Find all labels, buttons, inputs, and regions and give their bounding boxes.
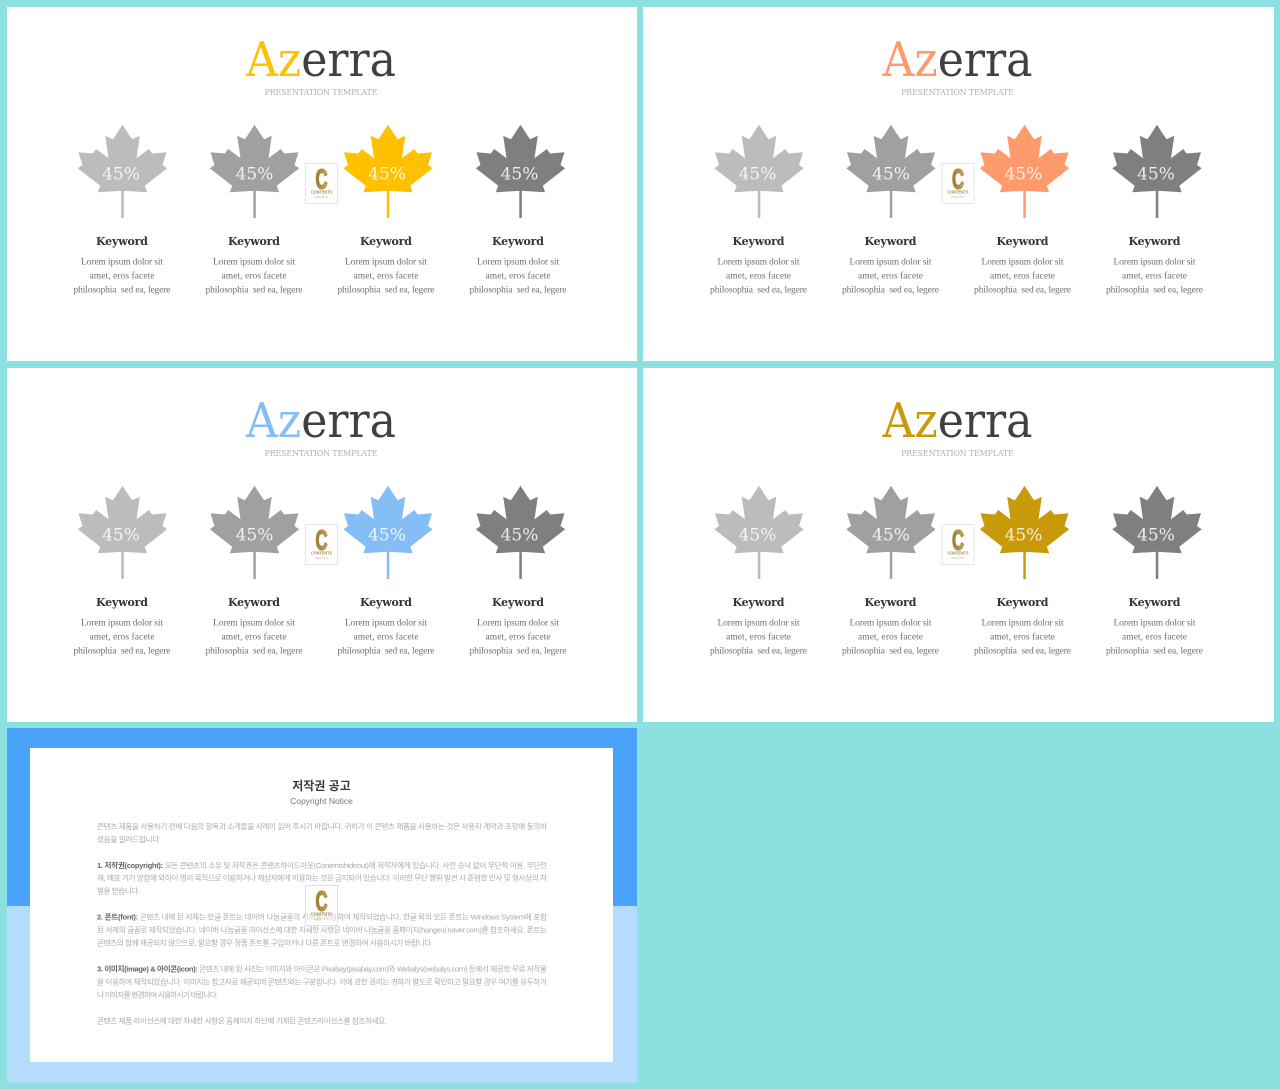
text column 4: amet, eros facete bbox=[486, 270, 550, 282]
paragraph: copyright bbox=[97, 860, 547, 896]
text column 3: Lorem ipsum dolor sit bbox=[982, 258, 1064, 268]
text column 3: philosophia sed ea, legere bbox=[338, 646, 434, 656]
text column 4: philosophia sed ea, legere bbox=[470, 646, 566, 656]
logo: CONTENTS bbox=[311, 912, 332, 916]
leaf 3 accent: 45% bbox=[1005, 526, 1042, 546]
text column 3: philosophia sed ea, legere bbox=[974, 646, 1071, 656]
leaf 4 bbox=[476, 486, 565, 579]
leaf 3 accent bbox=[980, 486, 1069, 579]
logo: C bbox=[952, 524, 964, 556]
logo: CONTENTS bbox=[311, 190, 332, 194]
leaf 1 bbox=[78, 486, 167, 579]
text column 4: Lorem ipsum dolor sit bbox=[477, 618, 559, 628]
logo: C bbox=[316, 164, 328, 194]
text column 2 bbox=[206, 235, 302, 296]
text column 2: Lorem ipsum dolor sit bbox=[213, 258, 295, 268]
leaf 1: 45% bbox=[739, 526, 776, 546]
text column 4: philosophia sed ea, legere bbox=[470, 286, 566, 296]
text column 3 bbox=[974, 596, 1071, 656]
text column 3: amet, eros facete bbox=[990, 270, 1055, 282]
leaf 2 bbox=[846, 486, 936, 579]
text column 1: amet, eros facete bbox=[90, 270, 154, 282]
leaf 2 bbox=[846, 125, 936, 218]
panel: orange slide bbox=[643, 7, 1274, 361]
logo bbox=[306, 886, 338, 926]
leaf 1: 45% bbox=[102, 164, 140, 184]
text column 3: Lorem ipsum dolor sit bbox=[345, 618, 427, 628]
text column 4: Keyword bbox=[1128, 596, 1181, 609]
text column 1: Lorem ipsum dolor sit bbox=[81, 258, 163, 268]
leaf 4 bbox=[1112, 486, 1202, 579]
leaf 2 bbox=[210, 125, 299, 218]
text column 1: philosophia sed ea, legere bbox=[710, 286, 807, 296]
text column 4: philosophia sed ea, legere bbox=[1106, 286, 1203, 296]
text column 4: Lorem ipsum dolor sit bbox=[477, 258, 559, 268]
logo bbox=[942, 524, 974, 564]
text column 2: Keyword bbox=[864, 596, 917, 609]
title: Azerra bbox=[245, 393, 396, 449]
panel: blue slide bbox=[7, 368, 637, 722]
text column 3: amet, eros facete bbox=[990, 632, 1055, 642]
leaf 4 bbox=[476, 125, 565, 218]
title: Azerra bbox=[245, 32, 396, 88]
text column 1: Lorem ipsum dolor sit bbox=[718, 618, 800, 628]
notice heading: 저작권 공고 bbox=[292, 778, 351, 793]
subtitle: PRESENTATION TEMPLATE bbox=[264, 449, 378, 458]
text column 2 bbox=[842, 596, 939, 656]
text column 4: Keyword bbox=[492, 596, 544, 609]
notice subheading: Copyright Notice bbox=[290, 796, 353, 806]
leaf 4: 45% bbox=[501, 164, 538, 184]
subtitle: PRESENTATION TEMPLATE bbox=[901, 88, 1014, 97]
text column 4: amet, eros facete bbox=[1122, 632, 1187, 642]
text column 2: amet, eros facete bbox=[222, 270, 286, 282]
text column 2: amet, eros facete bbox=[222, 632, 286, 642]
closing line: 콘텐츠 제품 라이선스에 대한 자세한 사항은 홈페이지 하단에 기재된 콘텐츠라이선스를 참조하세요. bbox=[97, 1016, 387, 1026]
leaf 1: 45% bbox=[102, 526, 140, 546]
text column 1 bbox=[710, 235, 807, 296]
text column 1: Lorem ipsum dolor sit bbox=[81, 618, 163, 628]
text column 3: Keyword bbox=[360, 235, 412, 248]
text column 4: philosophia sed ea, legere bbox=[1106, 646, 1203, 656]
leaf 3 accent: 45% bbox=[368, 164, 406, 184]
leaf 4: 45% bbox=[1137, 526, 1175, 546]
paragraph: image and icon: 을 이용하여 제작되었습니다. 이미지는 참고자료 제공되며 콘텐츠와는 구분합니다. 이에 관한 권리는 귀하가 별도로 확인하고 필요할 경우 여기를 유두하거 bbox=[97, 976, 547, 986]
text column 2: Lorem ipsum dolor sit bbox=[850, 618, 932, 628]
text column 1: philosophia sed ea, legere bbox=[74, 646, 170, 656]
text column 3: philosophia sed ea, legere bbox=[338, 286, 434, 296]
panel: copyright notice bbox=[7, 728, 637, 1083]
paragraph: image and icon: 3. 이미지(image) & 아이콘(icon): 콘텐츠 내에 된 사진는 이미지와 아이콘은 Pixabay(pixabay.com)와 Webalys(webalys.com) 등에서 제공한 무료 저작물 bbox=[97, 964, 547, 974]
paragraph: font: 된 서체의 글꼴로 제작되었습니다. 네이버 나눔글꼴 라이선스에 대한 자세한 사항은 네이버 나눔글꼴 홈페이지(hangeul.naver.com)를 참조하세요. 폰트는 bbox=[97, 924, 547, 934]
text column 1: philosophia sed ea, legere bbox=[74, 286, 170, 296]
logo: C bbox=[316, 886, 328, 916]
text column 4: Keyword bbox=[492, 235, 544, 248]
text column 1: Lorem ipsum dolor sit bbox=[718, 258, 800, 268]
leaf 4 bbox=[1112, 125, 1202, 218]
text column 3 bbox=[974, 235, 1071, 296]
paragraph: copyright: 벌을 받습니다. bbox=[97, 886, 140, 896]
text column 1 bbox=[710, 596, 807, 656]
logo: HIDE OUT bbox=[314, 556, 329, 560]
text column 2: Lorem ipsum dolor sit bbox=[850, 258, 932, 268]
text column 4: amet, eros facete bbox=[486, 632, 550, 642]
leaf 4: 45% bbox=[1137, 164, 1175, 184]
text column 4 bbox=[470, 235, 566, 296]
paragraph: image and icon bbox=[97, 964, 547, 1000]
leaf 2: 45% bbox=[236, 526, 273, 546]
leaf 2: 45% bbox=[236, 164, 273, 184]
leaf 3 accent: 45% bbox=[368, 526, 406, 546]
text column 4 bbox=[1106, 235, 1203, 296]
text column 1: philosophia sed ea, legere bbox=[710, 646, 807, 656]
text column 3: Lorem ipsum dolor sit bbox=[982, 618, 1064, 628]
leaf 1 bbox=[714, 125, 804, 218]
text column 2: philosophia sed ea, legere bbox=[206, 646, 302, 656]
text column 2: amet, eros facete bbox=[858, 632, 923, 642]
leaf 1 bbox=[78, 125, 167, 218]
logo: C bbox=[952, 164, 964, 194]
subtitle: PRESENTATION TEMPLATE bbox=[901, 449, 1014, 458]
text column 3: philosophia sed ea, legere bbox=[974, 286, 1071, 296]
leaf 3 accent: 45% bbox=[1005, 164, 1042, 184]
text column 4 bbox=[470, 596, 566, 656]
logo: CONTENTS bbox=[948, 190, 968, 194]
leaf 2: 45% bbox=[872, 164, 910, 184]
paragraph: image and icon: 나 이미지를 변경하여 사용하시기 바랍니다. bbox=[97, 990, 218, 1000]
subtitle: PRESENTATION TEMPLATE bbox=[264, 88, 378, 97]
text column 1: Keyword bbox=[732, 235, 785, 248]
logo: C bbox=[316, 524, 328, 556]
text column 1: Keyword bbox=[732, 596, 785, 609]
paragraph: font: 2. 폰트(font): 콘텐츠 내에 된 서체는 한글 폰트는 네이버 나눔글꼴의 서체를 사용하여 제작되었습니다. 한글 외의 모든 폰트는 Windows System에 포함 bbox=[97, 912, 547, 922]
leaf 2: 45% bbox=[872, 526, 910, 546]
text column 4: Keyword bbox=[1128, 235, 1181, 248]
paragraph: copyright: 1. 저작권(copyright): 모든 콘텐츠의 소유 및 저작권은 콘텐츠하이드아웃(Contentshideout)에 저작자에게 있습니다. 사전 승낙 없이 무단적 이용, 무단전 bbox=[97, 860, 547, 870]
text column 1: amet, eros facete bbox=[726, 632, 791, 642]
logo: HIDE OUT bbox=[951, 195, 965, 199]
logo: HIDE OUT bbox=[951, 556, 965, 560]
intro paragraph: 셨음을 알려드립니다. bbox=[97, 834, 161, 844]
leaf 3 accent bbox=[343, 125, 433, 218]
logo bbox=[306, 524, 338, 564]
leaf 1 bbox=[714, 486, 804, 579]
panel: yellow slide bbox=[7, 7, 637, 361]
leaf 2 bbox=[210, 486, 299, 579]
text column 3: amet, eros facete bbox=[354, 270, 418, 282]
logo bbox=[942, 164, 974, 204]
title: Azerra bbox=[882, 32, 1032, 88]
text column 3: amet, eros facete bbox=[354, 632, 418, 642]
text column 4 bbox=[1106, 596, 1203, 656]
leaf 3 accent bbox=[980, 125, 1069, 218]
text column 3 bbox=[338, 596, 434, 656]
logo: CONTENTS bbox=[948, 550, 968, 556]
text column 4: Lorem ipsum dolor sit bbox=[1114, 258, 1196, 268]
text column 2: amet, eros facete bbox=[858, 270, 923, 282]
text column 1: Keyword bbox=[96, 235, 148, 248]
text column 1 bbox=[74, 596, 170, 656]
text column 2 bbox=[842, 235, 939, 296]
text column 1: amet, eros facete bbox=[90, 632, 154, 642]
leaf 1: 45% bbox=[739, 164, 776, 184]
text column 3: Keyword bbox=[360, 596, 412, 609]
text column 2: philosophia sed ea, legere bbox=[842, 286, 939, 296]
text column 2: philosophia sed ea, legere bbox=[206, 286, 302, 296]
paragraph: font: 콘텐츠의 함께 제공되지 않으므로, 필요할 경우 정품 폰트를 구입하거나 다른 폰트로 변경하여 사용하시기 바랍니다. bbox=[97, 938, 433, 948]
paragraph: font bbox=[97, 912, 547, 948]
text column 3: Lorem ipsum dolor sit bbox=[345, 258, 427, 268]
text column 2: Lorem ipsum dolor sit bbox=[213, 618, 295, 628]
logo: CONTENTS bbox=[311, 550, 332, 556]
logo bbox=[306, 164, 338, 204]
leaf 4: 45% bbox=[501, 526, 538, 546]
text column 2: Keyword bbox=[228, 235, 280, 248]
text column 3 bbox=[338, 235, 434, 296]
text column 1 bbox=[74, 235, 170, 296]
text column 3: Keyword bbox=[996, 596, 1049, 609]
title: Azerra bbox=[882, 393, 1032, 449]
logo: HIDE OUT bbox=[314, 195, 329, 199]
intro paragraph bbox=[97, 821, 547, 844]
leaf 3 accent bbox=[343, 486, 433, 579]
text column 2: Keyword bbox=[228, 596, 280, 609]
logo: HIDE OUT bbox=[314, 917, 329, 921]
paragraph: copyright: 재, 배포 가기 양함에 와하이 영리 목적으로 이용하거나 제삼자에게 이용하는 것은 금지되어 있습니다. 이러한 무단 행위 발견 시 준엄한 민사 및 형사상의 처 bbox=[97, 872, 547, 882]
intro paragraph: 콘텐츠 제품을 사용하기 전에 다음의 항목과 소개들을 사례이 읽어 주시기 바랍니다. 귀하가 이 콘텐츠 제품을 사용하는 것은 사용자 계약과 조항에 동의하 bbox=[97, 821, 547, 831]
panel: gold slide bbox=[643, 368, 1274, 722]
text column 2: philosophia sed ea, legere bbox=[842, 646, 939, 656]
text column 1: amet, eros facete bbox=[726, 270, 791, 282]
text column 2: Keyword bbox=[864, 235, 917, 248]
text column 2 bbox=[206, 596, 302, 656]
text column 1: Keyword bbox=[96, 596, 148, 609]
text column 4: Lorem ipsum dolor sit bbox=[1114, 618, 1196, 628]
text column 3: Keyword bbox=[996, 235, 1049, 248]
text column 4: amet, eros facete bbox=[1122, 270, 1187, 282]
